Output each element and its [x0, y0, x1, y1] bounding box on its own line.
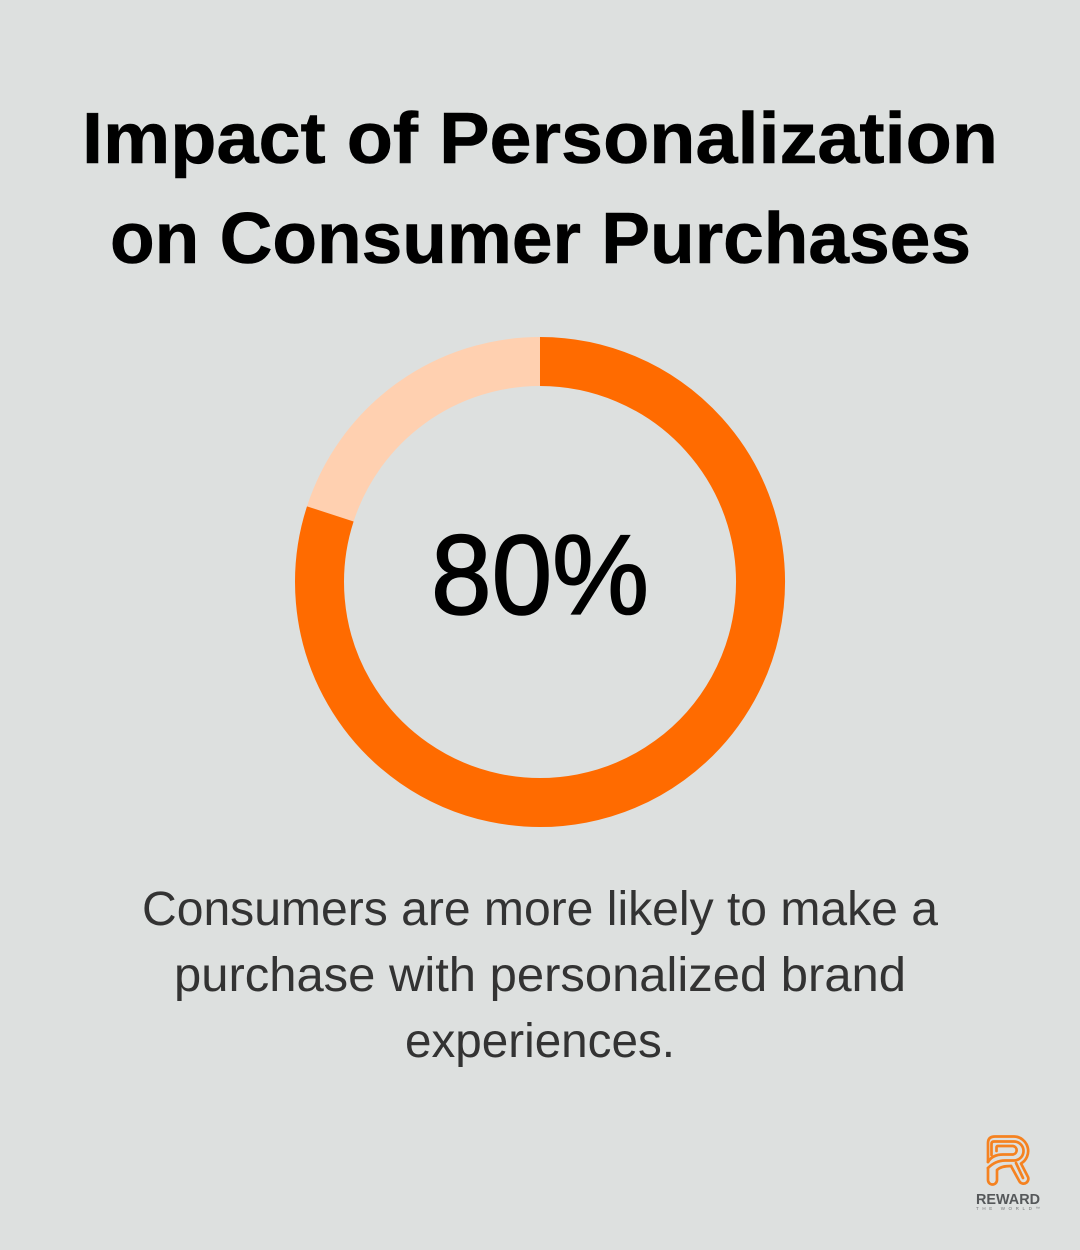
title	[82, 99, 998, 279]
80 percent segment	[320, 362, 761, 802]
title: Impact of Personalization	[82, 99, 998, 179]
logo: Reward the World	[976, 1136, 1040, 1211]
logo wordmark: REWARD	[976, 1192, 1040, 1208]
icon: R mark	[988, 1136, 1028, 1184]
description	[142, 883, 938, 1068]
description: Consumers are more likely to make a	[142, 883, 938, 936]
description: experiences.	[405, 1015, 675, 1068]
logo tagline: THE WORLD™	[976, 1206, 1040, 1211]
remaining 20 percent segment	[330, 362, 540, 514]
donut chart: 80 percent	[320, 362, 761, 802]
title: on Consumer Purchases	[110, 199, 971, 279]
donut value: 80%	[431, 512, 649, 638]
description: purchase with personalized brand	[174, 949, 906, 1002]
